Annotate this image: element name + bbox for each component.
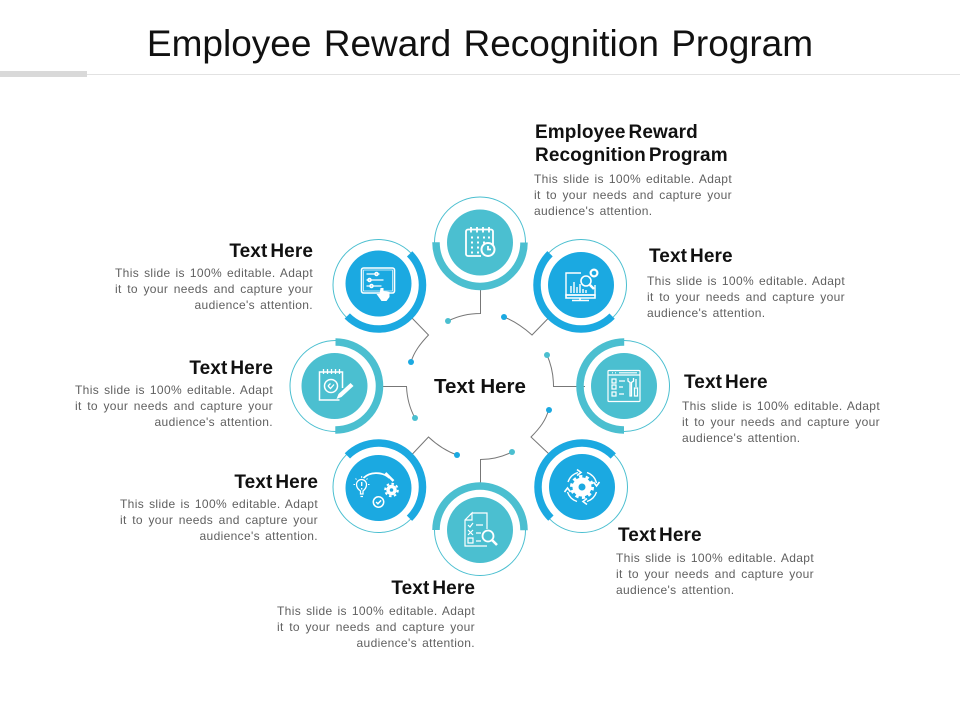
text: upper right node: it to your needs and capture your — [647, 290, 845, 304]
text: right node: This slide is 100% editable. Adapt — [682, 399, 880, 413]
text: right node: it to your needs and capture your — [682, 415, 880, 429]
text: upper right node: This slide is 100% editable. Adapt — [647, 274, 845, 288]
icon: gear with circular arrows — [564, 470, 600, 504]
title: Employee Reward Recognition Program — [147, 23, 813, 64]
text: lower left node — [120, 497, 318, 543]
text: upper left node: This slide is 100% editable. Adapt — [115, 266, 313, 280]
node: left notepad — [290, 340, 381, 432]
text: lower left node: audience's attention. — [200, 529, 318, 543]
text: top node: audience's attention. — [534, 204, 652, 218]
text: lower right node — [616, 551, 814, 597]
heading: left node: Text Here — [189, 358, 273, 379]
connector: upper right node — [501, 314, 550, 335]
text: left node: audience's attention. — [155, 415, 273, 429]
node: upper right monitor — [519, 223, 643, 347]
text: bottom node: This slide is 100% editable. Adapt — [277, 604, 475, 618]
text: left node: it to your needs and capture your — [75, 399, 273, 413]
text: top node — [534, 172, 732, 218]
connector: lower left node — [412, 437, 460, 458]
text: lower right node: audience's attention. — [616, 583, 734, 597]
text: lower right node: This slide is 100% editable. Adapt — [616, 551, 814, 565]
heading: lower left node: Text Here — [234, 472, 318, 493]
text: lower right node: it to your needs and capture your — [616, 567, 814, 581]
node: lower right gears — [520, 425, 644, 549]
text: upper right node: audience's attention. — [647, 306, 765, 320]
text: left node — [75, 383, 273, 429]
heading: top node — [535, 122, 728, 166]
text: top node: it to your needs and capture your — [534, 188, 732, 202]
text: upper right node — [647, 274, 845, 320]
icon: calendar with clock — [466, 227, 494, 256]
heading: top node: Recognition Program — [535, 145, 728, 166]
text: right node — [682, 399, 880, 445]
text: bottom node — [277, 604, 475, 650]
text: upper left node — [115, 266, 313, 312]
connector: left node — [380, 386, 418, 421]
text: upper left node: it to your needs and capture your — [115, 282, 313, 296]
text: bottom node: audience's attention. — [357, 636, 475, 650]
heading: lower right node: Text Here — [618, 525, 702, 546]
center label: Text Here — [434, 375, 526, 398]
node: top calendar — [434, 197, 526, 288]
icon: monitor with chart, magnifier and gear — [566, 270, 597, 300]
icon: window with checklist and tools — [608, 370, 640, 402]
node: right tools — [578, 340, 670, 432]
text: left node: This slide is 100% editable. Adapt — [75, 383, 273, 397]
connector: lower right node — [531, 407, 552, 454]
connector: upper left node — [408, 317, 428, 365]
text: bottom node: it to your needs and capture your — [277, 620, 475, 634]
text: lower left node: This slide is 100% editable. Adapt — [120, 497, 318, 511]
text: upper left node: audience's attention. — [195, 298, 313, 312]
text: lower left node: it to your needs and capture your — [120, 513, 318, 527]
text: right node: audience's attention. — [682, 431, 800, 445]
node: upper left touch panel — [316, 223, 441, 347]
connector: bottom node — [480, 449, 515, 485]
node: lower left idea — [316, 425, 441, 549]
icon: checklist with magnifier — [465, 513, 497, 546]
icon: touch panel with sliders — [362, 268, 394, 301]
connector: top node — [445, 288, 480, 324]
icon: bulb, arrow, gear and check — [354, 473, 398, 507]
heading: upper left node: Text Here — [229, 241, 313, 262]
text: top node: This slide is 100% editable. Adapt — [534, 172, 732, 186]
heading: bottom node: Text Here — [391, 578, 475, 599]
header rule with grey tab — [0, 71, 960, 77]
heading: right node: Text Here — [684, 372, 768, 393]
node: bottom document search — [434, 484, 526, 576]
heading: top node: Employee Reward — [535, 122, 698, 143]
heading: upper right node: Text Here — [649, 246, 733, 267]
icon: notepad with check and pencil — [320, 369, 354, 400]
connector: right node — [544, 352, 585, 386]
